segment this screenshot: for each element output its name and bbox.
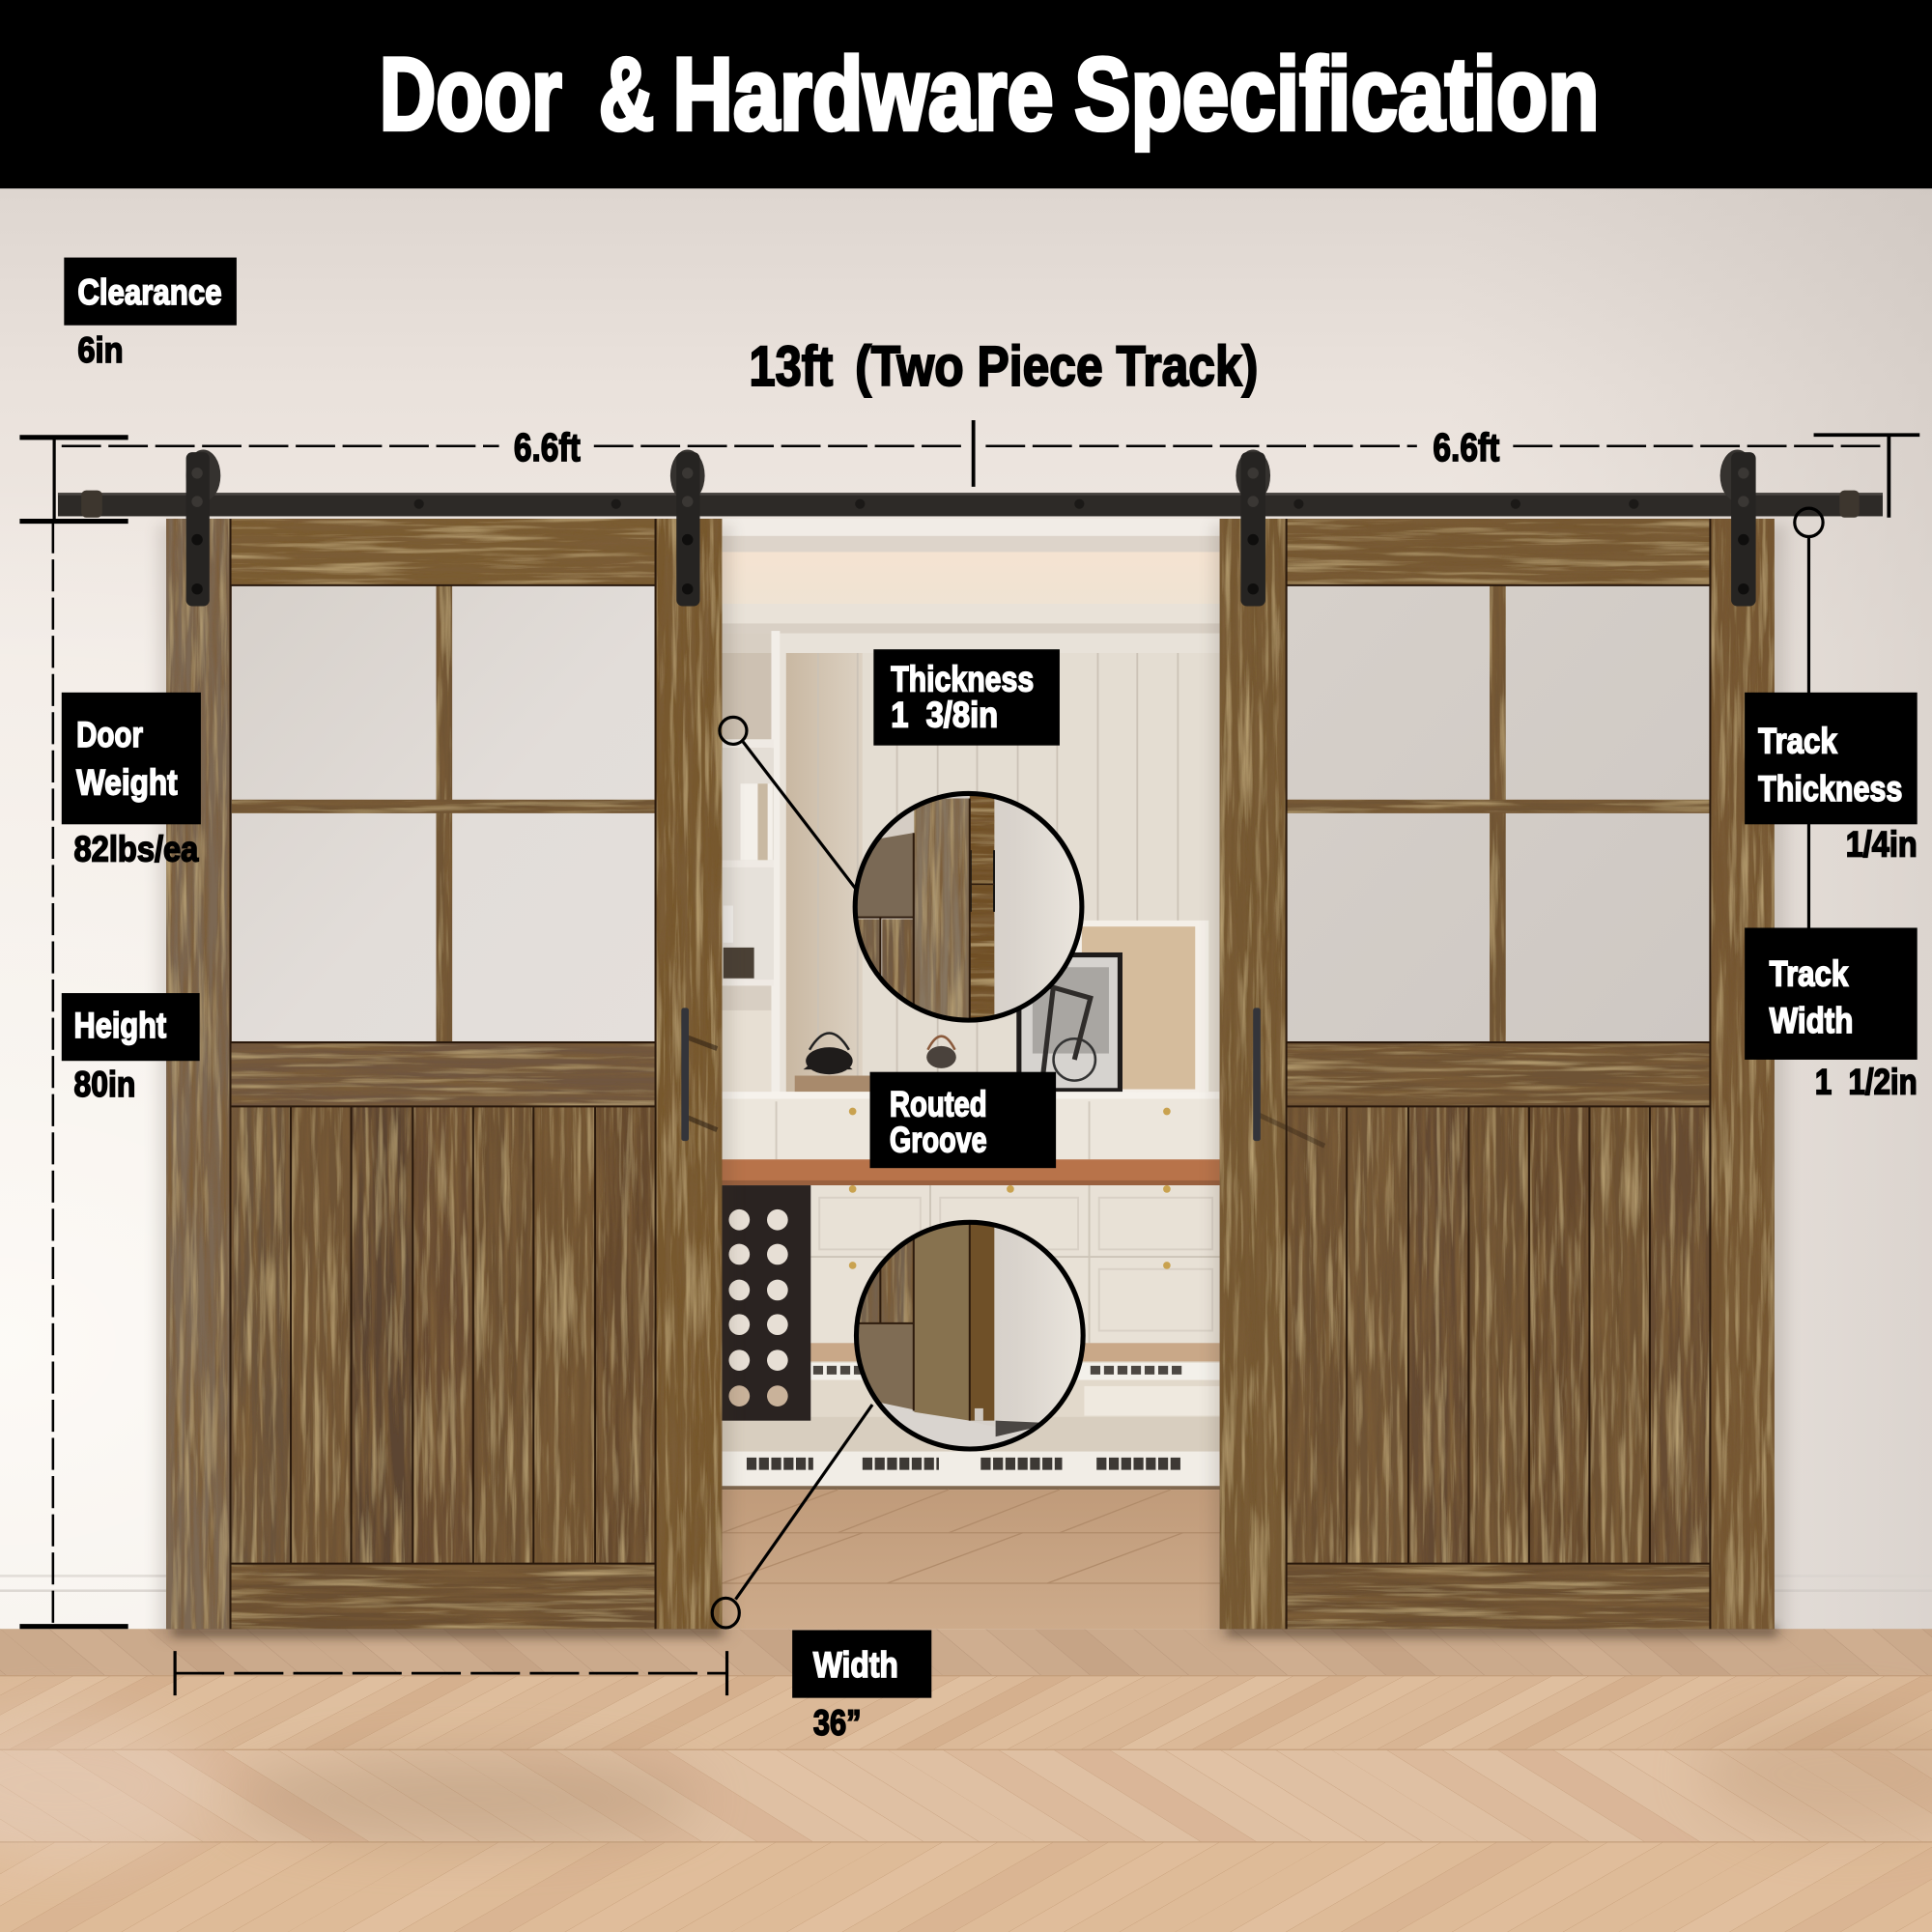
paneled back wall: [780, 634, 1220, 1096]
height label: [62, 993, 200, 1061]
track thickness label: Thickness: [1758, 769, 1902, 809]
width label: [792, 1631, 931, 1698]
track thickness label: Track: [1758, 721, 1837, 760]
thickness label: [873, 649, 1060, 746]
track thickness label: [1745, 693, 1918, 824]
track length heading: [750, 335, 1258, 398]
track width label: Width: [1770, 1001, 1853, 1040]
track width label: Track: [1770, 953, 1849, 993]
label: right 6.6ft: 6.6ft: [1433, 425, 1500, 469]
title: [380, 36, 1600, 152]
title: &: [599, 36, 654, 152]
left barn door: [166, 519, 722, 1629]
height value: 80in: [74, 1065, 135, 1104]
vertical planks: [231, 519, 656, 1629]
perforated dark panel: [722, 1185, 810, 1421]
header band: [0, 0, 1932, 188]
door height dimension line: [19, 522, 128, 1627]
height label: Height: [74, 1006, 166, 1045]
leader line and small circle: routed groove: [712, 1405, 872, 1628]
door handle: [1253, 1008, 1324, 1146]
routed groove label: Groove: [890, 1121, 987, 1160]
rug: [722, 1361, 1220, 1490]
window panes: [232, 584, 656, 1042]
vertical planks: [1287, 519, 1710, 1629]
leader line and small circle: thickness: [720, 717, 856, 890]
track dimension lines: [62, 420, 1886, 487]
routed groove label: [870, 1072, 1056, 1168]
clearance label: [64, 258, 237, 326]
leaning art and kettle: [795, 921, 1208, 1093]
door width dimension line: [175, 1651, 727, 1695]
clearance label: Clearance: [77, 272, 222, 312]
magnifier: routed groove detail: [855, 1222, 1086, 1452]
label: left 6.6ft: 6.6ft: [514, 425, 581, 469]
title: Door: [380, 36, 562, 152]
track length heading: 13ft: [750, 335, 833, 398]
clearance bracket right: [1814, 435, 1919, 518]
sliding track rail: [58, 491, 1883, 518]
thickness label: Thickness: [891, 660, 1034, 699]
floor in front of the opening: [722, 1490, 1220, 1629]
right barn door: [1220, 519, 1775, 1629]
door weight label: Door: [76, 715, 143, 754]
thickness label: 1 3/8in: [891, 696, 998, 735]
width label: Width: [813, 1645, 898, 1685]
magnifier: door thickness detail: [855, 793, 1083, 1020]
cabinets and counter: [722, 1092, 1220, 1361]
door handle: [681, 1008, 717, 1141]
door weight label: Weight: [76, 763, 178, 803]
wall background: [0, 188, 1932, 1633]
title: Hardware: [672, 36, 1054, 152]
bookshelf: [722, 631, 780, 1099]
door shadows: [157, 524, 1786, 1638]
clearance value: 6in: [77, 330, 124, 370]
door frame stiles and rails: [1220, 519, 1775, 1629]
track end stops: [81, 491, 1860, 518]
door weight label: [62, 693, 201, 824]
title: Specification: [1074, 36, 1600, 152]
track thickness value: 1/4in: [1846, 824, 1918, 864]
track width label: [1745, 927, 1918, 1060]
routed groove label: Routed: [890, 1085, 987, 1124]
hanger strap 1: [186, 450, 220, 607]
hanger strap 4: [1720, 450, 1756, 607]
track length heading: (Two Piece Track): [855, 335, 1258, 398]
door weight value: 82lbs/ea: [74, 830, 199, 869]
clearance bracket left: [19, 438, 128, 522]
hanger strap 3: [1236, 450, 1270, 607]
herringbone wood floor: [0, 1629, 1932, 1932]
track leader line and small circle: [1795, 508, 1823, 930]
door frame stiles and rails: [166, 519, 722, 1629]
hanger strap 2: [670, 450, 705, 607]
window panes: [1287, 584, 1710, 1042]
width value: 36”: [813, 1703, 862, 1743]
room interior seen through the opening: [722, 519, 1220, 1504]
